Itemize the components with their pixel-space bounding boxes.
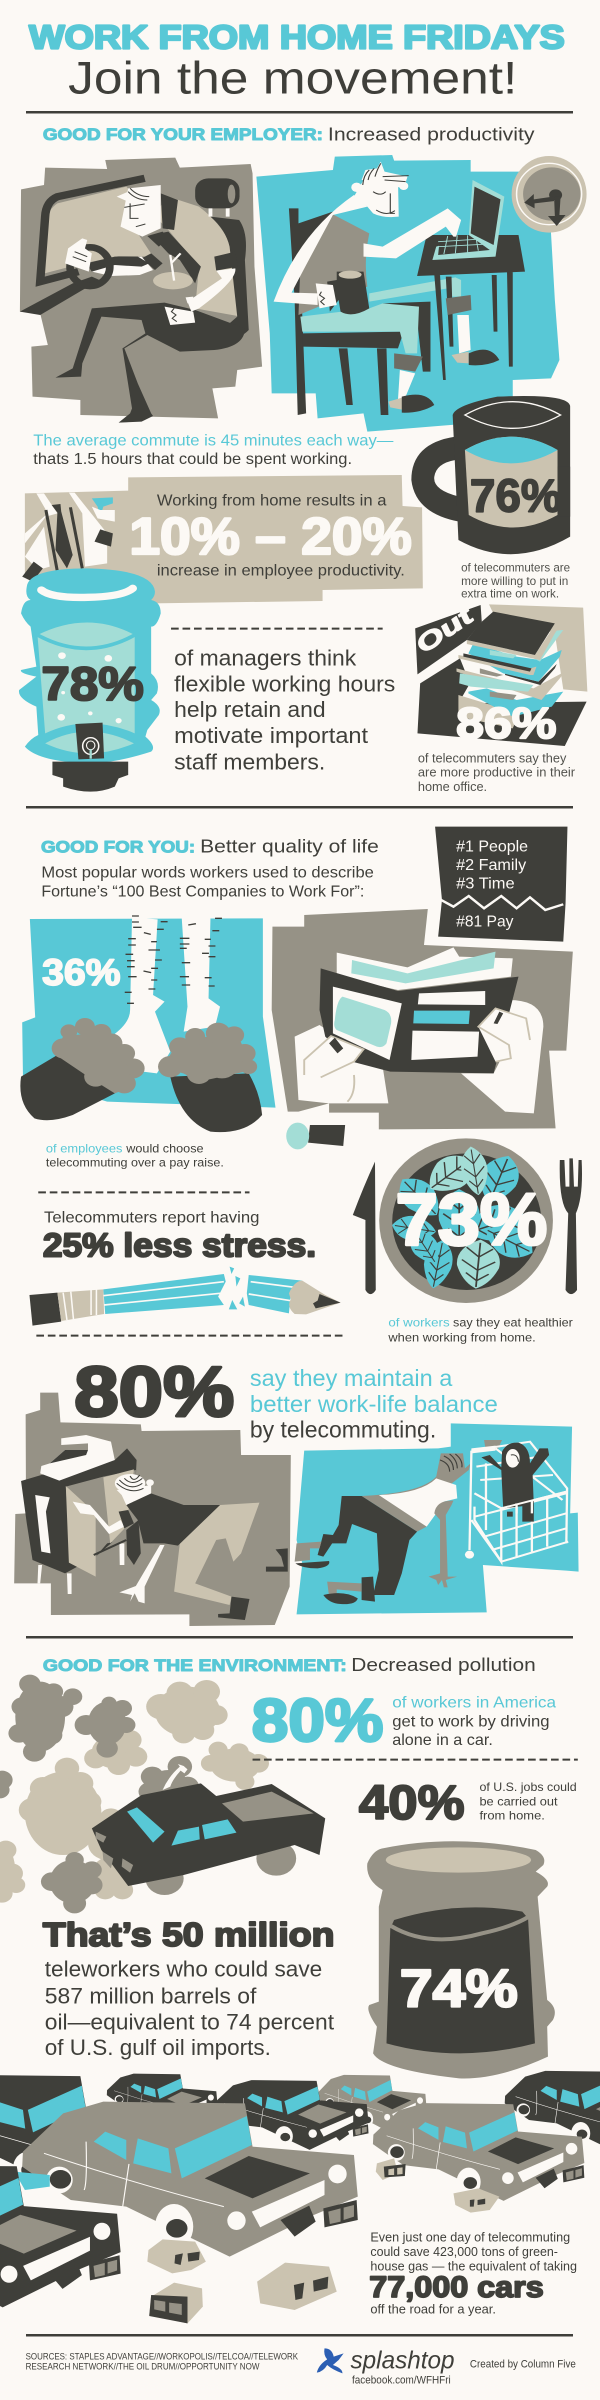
subheading: pollution: Decreased pollution [351,1655,536,1676]
stat: 76 percent: 76% [470,470,562,522]
logo: splashtop: splashtop [351,2345,455,2374]
illustration: slippers [20,916,276,1132]
text: workers in America: get to work by driving [392,1711,549,1730]
stat: 80 percent driving: 80% [252,1687,383,1754]
text: willing extra time: more willing to put in [461,574,568,588]
stat: 74 percent: 74% [400,1960,518,2019]
text: report having: Telecommuters report having [44,1208,259,1226]
text: workers in America: of workers in America [392,1693,556,1711]
text: one day greenhouse gas: Even just one day of telecommuting [370,2230,570,2244]
text: facebook link: facebook.com/WFHFri [352,2373,451,2386]
text: jobs carried out: be carried out [479,1794,558,1808]
text: jobs carried out: of U.S. jobs could [479,1780,577,1794]
label: Out: Out [410,602,481,658]
text: teleworkers save oil: oil—equivalent to 74 percent [45,2011,334,2035]
text: willing extra time [461,561,570,600]
illustration: stressed office worker [14,1393,291,1626]
text: teleworkers save oil: teleworkers who could save [45,1958,322,1982]
text: productive home office: home office. [418,780,487,794]
text: sources: RESEARCH NETWORK//THE OIL DRUM//OPPORTUNITY NOW [26,2362,260,2372]
text: willing extra time: extra time on work. [461,586,559,600]
text: sources [26,2352,298,2372]
text: productive home office: of telecommuters say they [418,751,566,765]
text: popular words: Most popular words workers used to describe [41,864,374,881]
text: managers think: flexible working hours [174,673,395,697]
illustration: traffic jam [0,2071,600,2323]
stat: 36 percent: 36% [42,952,121,993]
text: teleworkers save oil [45,1958,334,2061]
traffic jam and footer section [0,2071,600,2386]
environment section [0,1655,578,2078]
text: employees pay raise: of employees [46,1141,123,1155]
section rule [26,2334,573,2336]
text: better balance [250,1366,498,1443]
subtitle: Join the movement! [68,54,517,104]
panel: word ranking: #81 Pay [456,913,514,930]
text: sources: SOURCES: STAPLES ADVANTAGE//WORKOPOLIS//TELCOA//TELEWORK [26,2352,298,2362]
text: employees pay raise: telecommuting over a pay raise. [46,1156,224,1169]
illustration: car [92,1783,325,1886]
heading: good for you: GOOD FOR YOU: [41,837,195,856]
title: WORK FROM HOME FRIDAYS [29,18,565,56]
logo: splashtop [317,2345,455,2374]
text: workers in America [392,1693,556,1749]
text: working from home: Working from home results in a [157,491,387,509]
icon: broken pencil [29,1267,341,1326]
panel: word ranking: #1 People [456,837,528,855]
text: jobs carried out: from home. [479,1809,545,1822]
illustration: out tray [410,602,587,748]
text: teleworkers save oil: 587 million barrels of [45,1985,257,2009]
text: eat healthier: when working from home. [387,1330,536,1344]
stat: 86 percent: 86% [456,699,556,748]
subheading: productivity: Increased productivity [328,125,535,145]
text: off the road: off the road for a year. [370,2301,496,2316]
text: workers in America: alone in a car. [392,1730,493,1749]
text: jobs carried out [479,1780,577,1822]
stat: 25 percent less stress: 25% less stress. [43,1227,316,1264]
icon: mug [411,396,570,554]
text: productivity increase: increase in employee productivity. [157,560,405,579]
subheading: quality of life: Better quality of life [200,837,379,857]
stat: 50 million: That’s 50 million [43,1916,334,1953]
top region: title and employer illustrations [20,18,587,468]
section rule [26,111,573,114]
text: managers think: motivate important [174,724,369,749]
illustration: telecommuter at laptop [256,155,559,432]
productivity and managers section [19,396,587,794]
text: eat healthier: say they eat healthier [453,1316,573,1329]
stat: 40 percent: 40% [359,1776,465,1830]
illustration: commuter driving [20,158,262,423]
text: managers think [174,647,395,775]
divider dashes [253,1757,578,1763]
divider dashes [171,626,383,632]
text: popular words [41,864,374,900]
icon: water cooler [19,568,161,792]
icon: knife [353,1162,376,1294]
text: managers think: staff members. [174,751,325,775]
text: eat healthier: of workers [388,1316,450,1329]
text: willing extra time: of telecommuters are [461,561,570,574]
text: eat healthier [387,1316,573,1344]
stat: 10 to 20 percent: 10% – 20% [129,507,412,565]
icon: oil barrel [367,1841,555,2078]
text: better balance: better work-life balance [250,1392,498,1418]
heading: environment: GOOD FOR THE ENVIRONMENT: [43,1655,347,1675]
text: productive home office: are more productive in their [418,766,576,779]
illustration: salad plate [379,1138,553,1303]
text: average commute: The average commute is 45 minutes each way— [33,431,394,449]
text: managers think: help retain and [174,698,326,723]
illustration: parent and shopping cart [295,1423,579,1614]
divider dashes [38,1189,249,1195]
text: spent working: thats 1.5 hours that could be spent working. [33,449,352,468]
stat: 77,000 cars: 77,000 cars [369,2270,544,2303]
text: popular words: Fortune’s “100 Best Companies to Work For”: [41,883,364,900]
panel: productivity [25,475,423,603]
icon: wall clock [512,156,587,233]
text: better balance: say they maintain a [250,1366,453,1392]
divider dashes [36,1333,344,1339]
section rule [26,1636,573,1638]
stress and healthy eating section [29,1138,582,1344]
text: managers think: of managers think [174,647,356,671]
stat: 73 percent: 73% [396,1178,547,1260]
illustration: shirt and tie [22,493,115,582]
text: one day greenhouse gas: could save 423,000 tons of green- [370,2244,558,2259]
stat: 80 percent balance: 80% [74,1353,234,1432]
text: productive home office [418,751,576,794]
text: one day greenhouse gas [370,2230,577,2273]
text: employees pay raise [46,1141,224,1169]
section rule [26,806,573,808]
panel: word ranking [435,827,567,942]
illustration: reading newspaper [272,909,573,1149]
heading: employer: GOOD FOR YOUR EMPLOYER: [43,124,323,144]
text: employees pay raise: would choose [125,1141,204,1155]
text: teleworkers save oil: of U.S. gulf oil imports. [45,2036,271,2061]
illustration: exhaust clouds [0,1675,296,1913]
stat: 78 percent: 78% [41,657,144,710]
icon: fork [560,1158,582,1294]
panel: word ranking: #2 Family [456,856,527,874]
work-life balance section [14,1353,579,1626]
panel: word ranking: #3 Time [456,875,515,892]
text: better balance: by telecommuting. [250,1418,436,1443]
quality of life section [20,827,573,1169]
